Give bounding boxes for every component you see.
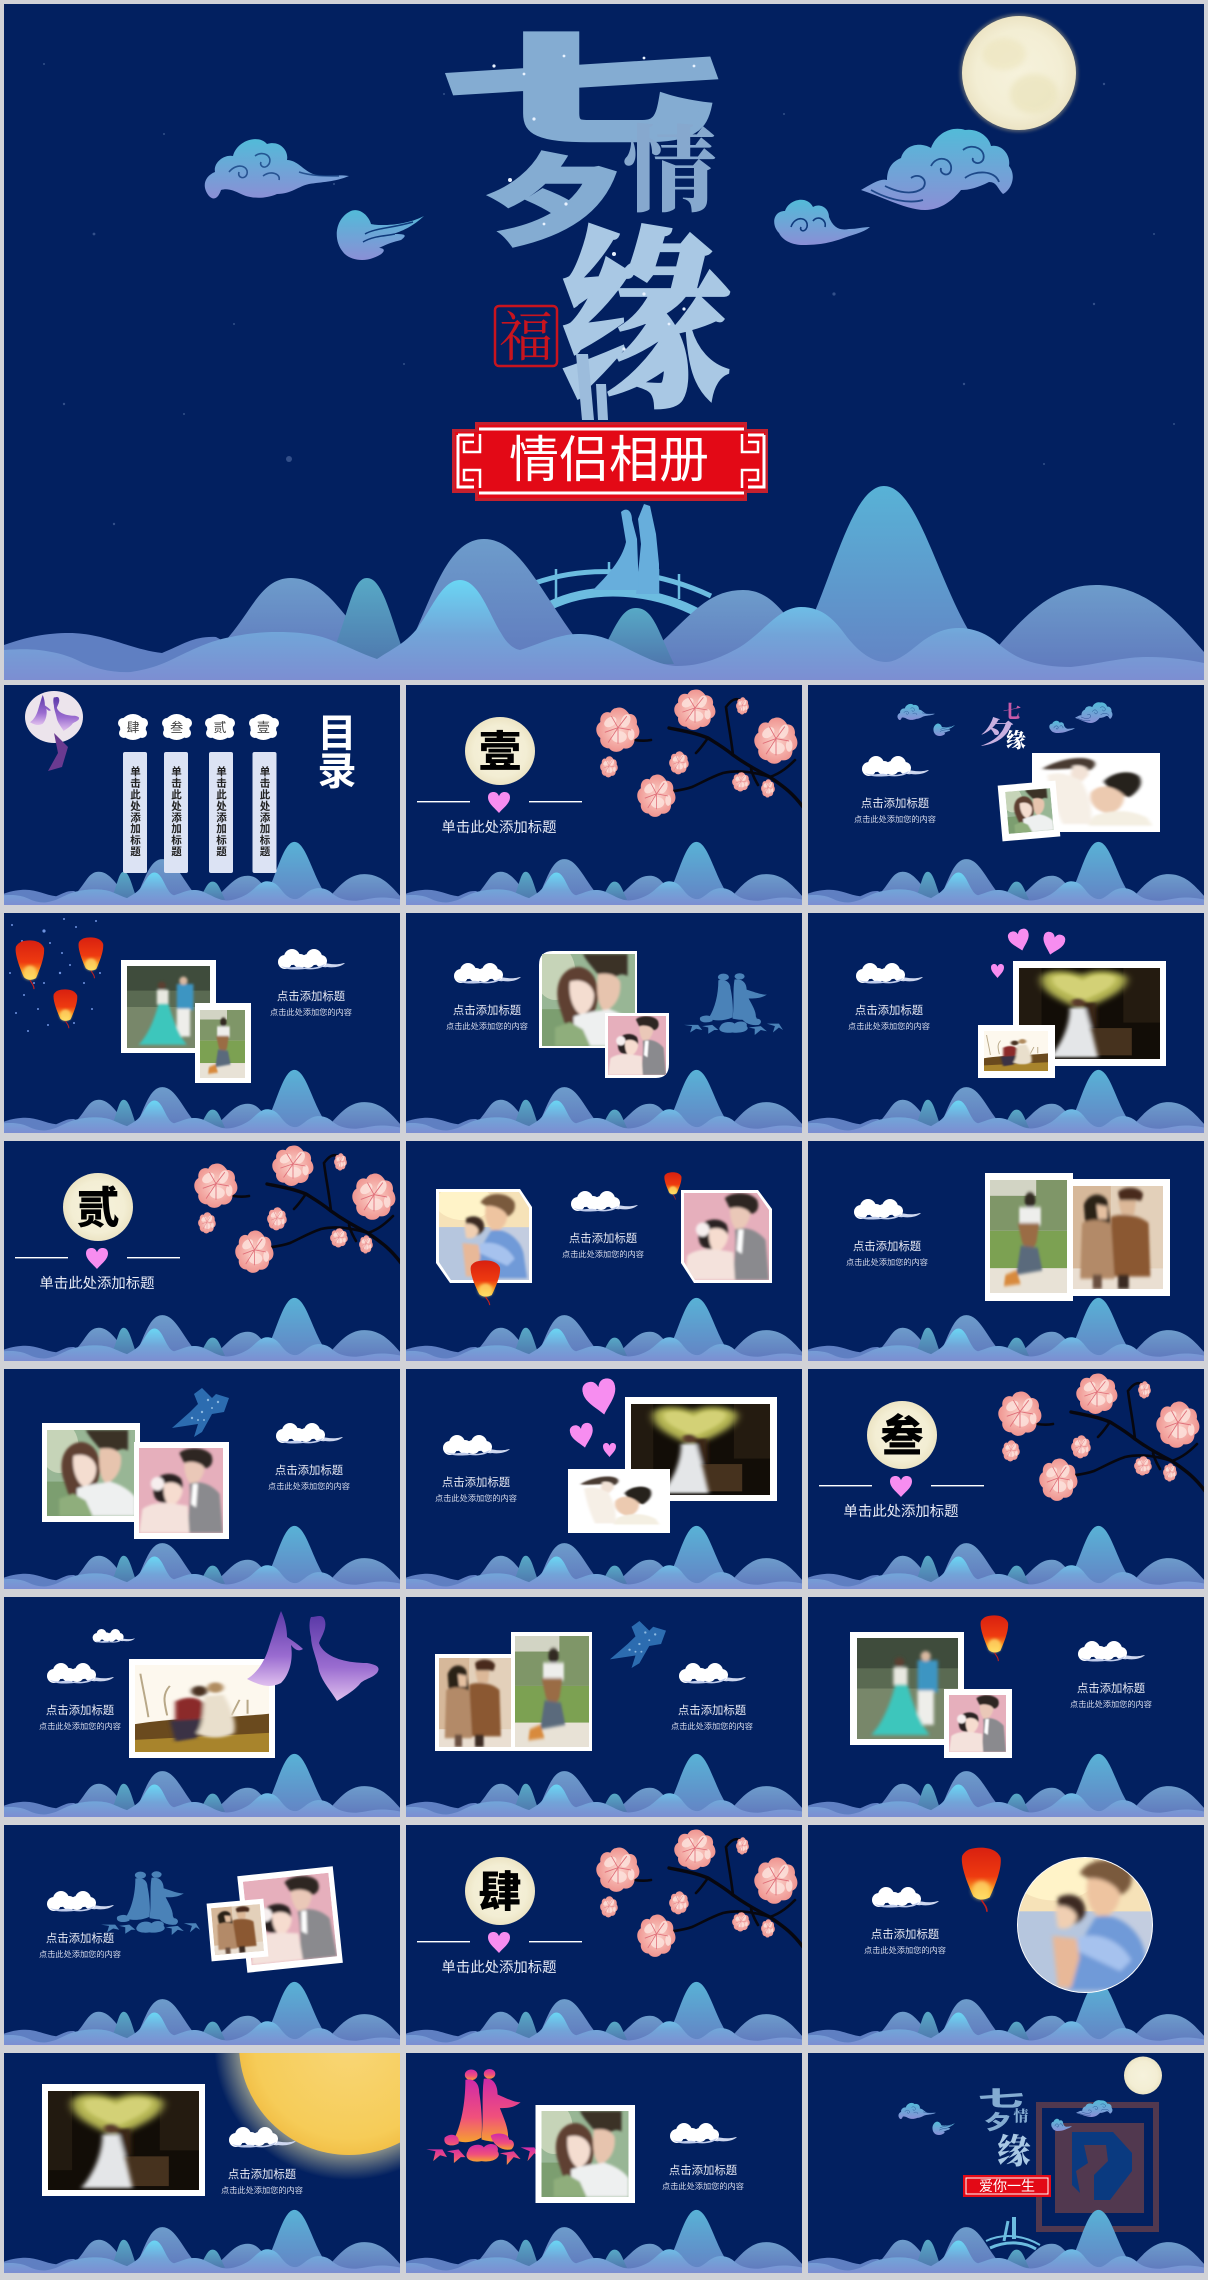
panel: slide hearts <box>808 913 1204 1133</box>
icon: paper crane <box>172 1388 229 1437</box>
icon: ornate cloud near left <box>337 210 424 260</box>
panel: slide circular photo <box>808 1825 1204 2045</box>
title calligraphy: 情 <box>623 120 717 224</box>
photo large <box>625 1397 777 1501</box>
text block: 点击此处添加您的内容 <box>221 2185 303 2195</box>
panel: slide chamfered photos <box>406 1141 802 1361</box>
bridge and couple <box>986 2217 1040 2249</box>
panel: slide big hearts <box>406 1369 802 1589</box>
icon: ornate cloud near right <box>774 200 870 245</box>
lantern <box>981 1615 1008 1661</box>
text block <box>864 1887 946 1955</box>
photo left <box>985 1173 1073 1301</box>
section moon: 叁 <box>880 1412 924 1461</box>
text block: 点击添加标题 <box>442 1475 510 1489</box>
icon: ornate cloud far left <box>205 139 349 198</box>
contents badges: 叁 <box>170 720 183 735</box>
yellow moon <box>214 1910 484 2180</box>
section title: 单击此处添加标题 <box>843 1503 959 1520</box>
photo <box>129 1659 275 1758</box>
lantern <box>962 1848 1001 1912</box>
text block <box>846 1199 928 1267</box>
text block <box>446 963 528 1031</box>
section divider <box>15 1248 180 1269</box>
panel: table of contents slide <box>4 685 400 905</box>
mini title <box>978 2087 1031 2171</box>
photo small tilted <box>998 781 1060 841</box>
panel: slide crane two <box>406 1597 802 1817</box>
fairy figures <box>247 1611 379 1701</box>
couple silhouette gradient <box>426 2069 539 2165</box>
panel: slide crane <box>4 1369 400 1589</box>
panel: section one <box>406 685 802 905</box>
hearts <box>569 1377 620 1457</box>
blossom branch <box>596 689 803 817</box>
text block <box>270 949 352 1017</box>
photo small <box>568 1469 670 1533</box>
text block: 点击添加标题 <box>46 1703 114 1717</box>
photo right <box>134 1442 229 1539</box>
text block: 点击此处添加您的内容 <box>848 1021 930 1031</box>
couple silhouette <box>684 973 783 1035</box>
text block <box>39 1663 121 1731</box>
section divider <box>819 1476 984 1497</box>
section divider <box>417 1932 582 1953</box>
title calligraphy: 缘 <box>560 217 732 431</box>
title calligraphy: 七 <box>441 26 719 157</box>
contents badges: 壹 <box>257 720 270 735</box>
banner title text: 情侣相册 <box>509 432 709 488</box>
section moon: 壹 <box>478 729 522 777</box>
panel: slide fairies <box>4 1597 400 1817</box>
section title: 单击此处添加标题 <box>39 1275 155 1292</box>
scroll items: 单击此处添加标题 <box>170 765 182 857</box>
contents badges <box>118 714 279 740</box>
star field <box>9 918 101 1032</box>
lanterns <box>16 937 103 1028</box>
text block <box>848 963 930 1031</box>
panel: slide gradient silhouette <box>406 2053 802 2273</box>
text block: 点击此处添加您的内容 <box>39 1721 121 1731</box>
text block: 点击此处添加您的内容 <box>1070 1699 1152 1709</box>
panel: section three <box>808 1369 1204 1589</box>
heading: 录 <box>317 751 357 794</box>
text block: 点击此处添加您的内容 <box>39 1949 121 1959</box>
seal stamp: 福 <box>499 308 553 368</box>
scroll items: 单击此处添加标题 <box>215 765 227 857</box>
text block <box>662 2123 744 2191</box>
section moon <box>63 1173 133 1241</box>
text block <box>1070 1641 1152 1709</box>
photo left <box>40 1421 140 1522</box>
photo right <box>511 1632 592 1751</box>
photo small <box>944 1689 1012 1758</box>
text block: 点击添加标题 <box>275 1463 343 1477</box>
photo big tilted <box>237 1866 343 1973</box>
text block: 点击添加标题 <box>678 1703 746 1717</box>
text block: 点击添加标题 <box>861 796 929 810</box>
mini title: 夕 <box>984 2112 1012 2134</box>
title calligraphy: 夕 <box>485 148 627 257</box>
moon <box>1124 2056 1162 2094</box>
text block: 点击此处添加您的内容 <box>435 1493 517 1503</box>
photo right <box>681 1190 772 1283</box>
scroll items: 单击此处添加标题 <box>129 765 141 857</box>
decorative clouds <box>898 2100 1112 2135</box>
photo small <box>195 1003 251 1083</box>
text block: 点击添加标题 <box>855 1003 923 1017</box>
panel: slide yellow moon <box>4 2053 400 2273</box>
lanterns <box>471 1172 681 1305</box>
section moon <box>867 1401 937 1469</box>
text block: 点击添加标题 <box>569 1231 637 1245</box>
text block: 点击添加标题 <box>871 1927 939 1941</box>
text block: 点击此处添加您的内容 <box>864 1945 946 1955</box>
text block: 点击添加标题 <box>228 2167 296 2181</box>
text block: 点击此处添加您的内容 <box>446 1021 528 1031</box>
photo large <box>850 1632 964 1745</box>
text block <box>671 1663 753 1731</box>
closing banner: 爱你一生 <box>979 2178 1035 2194</box>
text block: 点击添加标题 <box>1077 1681 1145 1695</box>
mini title logo: 七 <box>1003 702 1021 722</box>
photo <box>42 2084 205 2196</box>
couple silhouette <box>101 1871 200 1935</box>
section divider <box>417 792 582 813</box>
panel: slide photos white <box>808 685 1204 905</box>
photo small <box>978 1025 1055 1078</box>
photo left <box>435 1654 511 1751</box>
text block: 点击此处添加您的内容 <box>562 1249 644 1259</box>
panel: cover slide <box>4 4 1204 680</box>
photo large <box>1013 961 1166 1066</box>
text block: 点击此处添加您的内容 <box>671 1721 753 1731</box>
heading: 目 <box>317 713 357 756</box>
text block <box>854 756 936 824</box>
text block <box>562 1191 644 1259</box>
icon: paper crane <box>610 1621 666 1668</box>
mini title logo <box>980 702 1026 752</box>
text block <box>39 1891 121 1959</box>
section title: 单击此处添加标题 <box>441 819 557 836</box>
text block: 点击添加标题 <box>453 1003 521 1017</box>
text block: 点击此处添加您的内容 <box>662 2181 744 2191</box>
text block: 点击添加标题 <box>277 989 345 1003</box>
photo right <box>1073 1179 1170 1296</box>
section title: 单击此处添加标题 <box>441 1959 557 1976</box>
text block: 点击添加标题 <box>853 1239 921 1253</box>
text block: 点击添加标题 <box>46 1931 114 1945</box>
text block: 点击此处添加您的内容 <box>270 1007 352 1017</box>
text block: 点击此处添加您的内容 <box>854 814 936 824</box>
photo left <box>435 1185 532 1283</box>
section moon: 肆 <box>478 1869 522 1917</box>
hearts <box>991 927 1066 978</box>
section moon: 贰 <box>76 1185 120 1233</box>
panel: section four <box>406 1825 802 2045</box>
decorative clouds <box>897 702 1112 736</box>
text block: 点击此处添加您的内容 <box>846 1257 928 1267</box>
watermark stamp <box>1039 2105 1156 2229</box>
contents badges: 肆 <box>126 720 140 735</box>
text block: 点击添加标题 <box>669 2163 737 2177</box>
mountains <box>4 486 1204 680</box>
text block: 点击此处添加您的内容 <box>268 1481 350 1491</box>
photo large rounded <box>535 945 637 1048</box>
panel: slide lanterns <box>4 913 400 1133</box>
blossom branch <box>596 1829 803 1957</box>
moon <box>960 14 1078 132</box>
title banner <box>452 422 768 501</box>
photo small rounded <box>605 1013 669 1078</box>
circular photo <box>1017 1857 1153 1993</box>
panel: slide two portraits <box>808 1141 1204 1361</box>
mini title: 七 <box>978 2087 1024 2111</box>
bridge with couple silhouette <box>535 504 711 614</box>
mini title logo: 缘 <box>1006 729 1026 752</box>
section moon <box>465 1857 535 1925</box>
photo large <box>121 960 216 1053</box>
panel: slide lantern portrait <box>808 1597 1204 1817</box>
text block <box>435 1435 517 1503</box>
mini title: 情 <box>1013 2107 1029 2125</box>
closing banner <box>963 2175 1051 2197</box>
panel: slide tilted photos <box>4 1825 400 2045</box>
text block <box>221 2127 303 2195</box>
photo large <box>1032 753 1160 832</box>
heading <box>317 713 357 794</box>
scroll items: 单击此处添加标题 <box>258 765 270 857</box>
moon with fairies <box>25 691 83 771</box>
photo <box>535 2102 635 2203</box>
small cloud <box>93 1629 135 1643</box>
icon: ornate cloud far right <box>861 129 1013 210</box>
title calligraphy <box>441 26 732 431</box>
mini title: 缘 <box>997 2133 1031 2171</box>
blossom branch <box>194 1145 401 1273</box>
mini title logo: 夕 <box>980 717 1016 750</box>
blossom branch <box>998 1373 1205 1501</box>
text block <box>268 1423 350 1491</box>
photo small tilted <box>207 1899 268 1961</box>
scroll items <box>123 752 276 873</box>
panel: closing slide <box>808 2053 1204 2273</box>
contents badges: 贰 <box>213 720 227 735</box>
section moon <box>465 717 535 785</box>
panel: section two <box>4 1141 400 1361</box>
panel: slide silhouette <box>406 913 802 1133</box>
